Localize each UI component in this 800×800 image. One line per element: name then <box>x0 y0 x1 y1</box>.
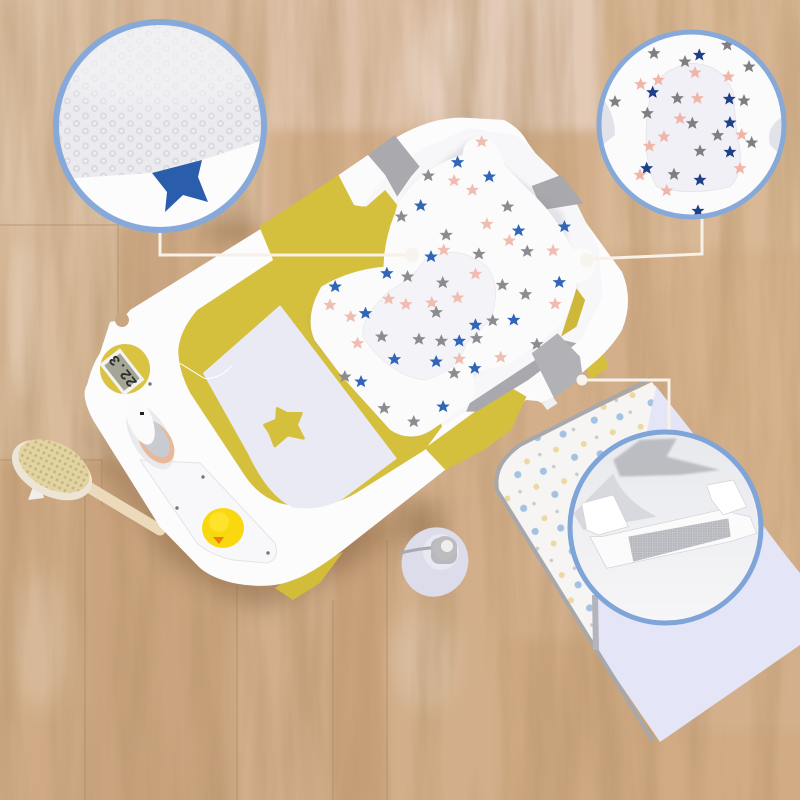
brush tabs <box>28 442 62 500</box>
screw holes <box>148 382 270 555</box>
notch <box>115 313 129 327</box>
side gaps <box>602 101 782 152</box>
pillow circle ring <box>599 32 784 217</box>
thermometer badge <box>99 344 150 396</box>
brush bristles <box>10 428 98 504</box>
lcd screen <box>104 353 140 391</box>
towel fold <box>595 595 596 650</box>
leader line: mesh callout <box>160 230 419 262</box>
mesh circle content <box>59 25 261 227</box>
pillow stars <box>323 135 571 427</box>
lower strap clip <box>542 397 558 410</box>
blue star <box>152 160 208 212</box>
towel hem <box>496 378 653 741</box>
tray <box>140 460 276 563</box>
mat <box>204 307 395 507</box>
pillow circle content <box>602 34 782 214</box>
grey inner strip <box>466 340 577 412</box>
mat star <box>264 408 303 446</box>
clip circle content <box>572 434 758 620</box>
tub foot <box>275 552 343 600</box>
mesh strap <box>628 518 731 562</box>
pump <box>401 547 440 553</box>
white rim block <box>509 368 552 403</box>
soft floor shadows <box>90 216 442 610</box>
mat string <box>180 363 232 378</box>
leader line: pillow callout <box>580 218 702 267</box>
pillow shadow <box>308 140 577 440</box>
pillow seat <box>363 252 496 380</box>
clip circle ring <box>570 432 761 623</box>
tub interior wall <box>252 133 597 443</box>
towel plain side <box>595 385 800 742</box>
brush <box>2 427 160 530</box>
brush handle <box>90 488 160 530</box>
white band <box>74 142 260 227</box>
seat panel <box>608 38 758 216</box>
clip background shapes <box>613 438 720 477</box>
tub right foot <box>585 355 608 380</box>
leader line: clip callout <box>576 374 669 434</box>
mesh circle ring <box>56 22 264 230</box>
left clip tab <box>582 495 628 535</box>
top strap <box>368 135 420 197</box>
tub outer body <box>85 118 628 586</box>
towel printed side <box>498 382 656 650</box>
brush head <box>2 427 102 513</box>
right strap <box>532 175 583 210</box>
right clip tab <box>707 480 747 515</box>
pillow detail stars <box>608 38 758 216</box>
yellow tub floor <box>178 237 442 507</box>
yellow upper wall <box>259 175 397 267</box>
clip base bar <box>590 510 757 568</box>
sponge in cup <box>116 391 184 477</box>
wedge shadow <box>573 473 657 530</box>
bath tub <box>85 118 628 600</box>
pillow cushion <box>311 138 596 437</box>
lower strap <box>532 333 583 398</box>
lcd digits: 22.3 <box>106 351 142 390</box>
top strap highlight <box>339 155 385 207</box>
yellow lower wall <box>425 387 527 470</box>
yellow inner sliver <box>561 288 585 337</box>
callout: mesh fabric detail <box>53 19 267 233</box>
towel <box>496 378 800 742</box>
rubber duck <box>202 508 244 548</box>
lcd frame <box>99 348 145 396</box>
callout: pillow detail <box>595 28 790 223</box>
callout: clip detail <box>565 430 770 625</box>
soap dispenser <box>390 516 480 608</box>
